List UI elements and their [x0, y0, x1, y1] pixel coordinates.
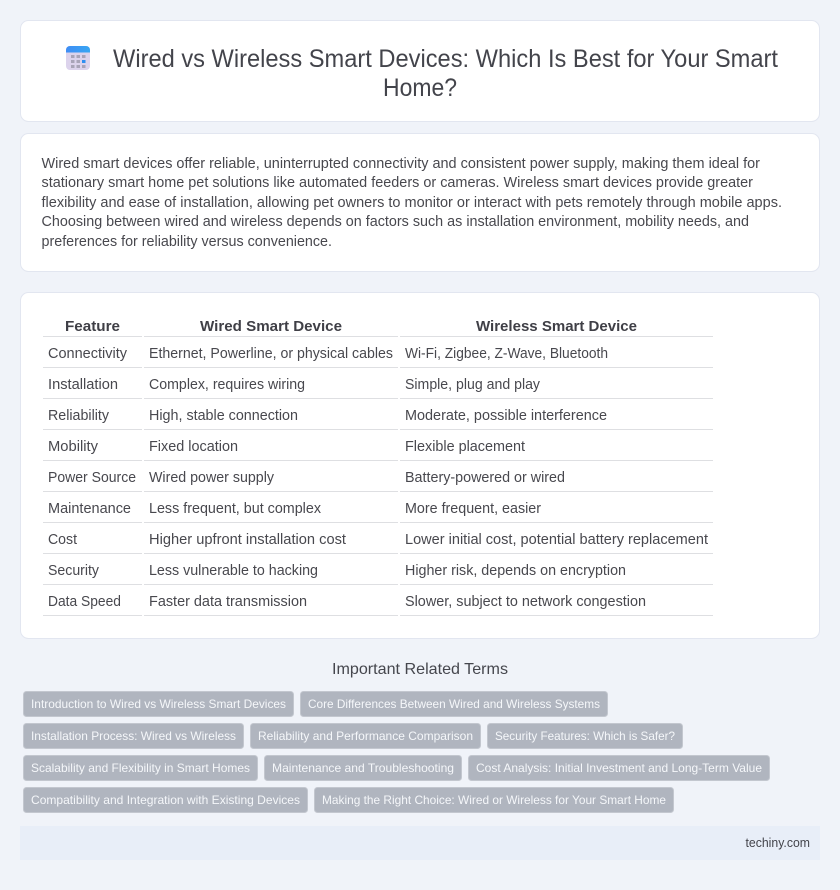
table row: power source [48, 470, 565, 486]
table row: mobility: Fixed location [149, 439, 238, 455]
table row: mobility: Mobility [48, 439, 99, 455]
icon: calendar [66, 46, 90, 70]
table row: installation: Installation [48, 377, 118, 393]
table row: connectivity: Connectivity [48, 346, 128, 362]
tag [24, 692, 294, 716]
table row: reliability [48, 408, 607, 424]
table row: maintenance: More frequent, easier [405, 501, 541, 517]
table row: cost: Higher upfront installation cost [149, 532, 346, 548]
footer [20, 826, 820, 860]
title: Home? [383, 74, 457, 102]
table row: maintenance: Maintenance [48, 501, 131, 517]
table row: power source: Battery-powered or wired [405, 470, 565, 486]
tag: Making the Right Choice: Wired or Wireless for Your Smart Home [322, 793, 666, 807]
tag: Maintenance and Troubleshooting [272, 761, 454, 775]
table row: reliability: Reliability [48, 408, 110, 424]
table row: power source: Power Source [48, 470, 136, 486]
table row: maintenance: Less frequent, but complex [149, 501, 322, 517]
text block: introduction paragraph: stationary smart home pet solutions like automated feeders or cameras. Wireless smart devices provide greater [42, 175, 753, 191]
tag [24, 788, 308, 812]
table row: security: Higher risk, depends on encryption [405, 563, 626, 579]
text block: introduction paragraph: Wired smart devices offer reliable, uninterrupted connectivity and consistent power supply, making them ideal for [42, 156, 760, 172]
text block: introduction paragraph: Choosing between wired and wireless depends on factors such as installation environment, mobility needs, and [42, 214, 749, 230]
text block: introduction paragraph [42, 156, 782, 250]
table row: reliability: Moderate, possible interference [405, 408, 607, 424]
tag [488, 724, 682, 748]
table row: power source: Wired power supply [149, 470, 275, 486]
table row: connectivity: Ethernet, Powerline, or physical cables [149, 346, 393, 362]
tag: Installation Process: Wired vs Wireless [31, 729, 236, 743]
tag: Core Differences Between Wired and Wireless Systems [308, 697, 600, 711]
table row: installation: Complex, requires wiring [149, 377, 305, 393]
tag [264, 756, 462, 780]
table row: connectivity: Wi-Fi, Zigbee, Z-Wave, Bluetooth [405, 346, 608, 362]
table row: cost: Lower initial cost, potential battery replacement [405, 532, 708, 548]
panel: introduction [20, 134, 820, 272]
table row: installation: Simple, plug and play [405, 377, 541, 393]
table row: cost: Cost [48, 532, 77, 548]
title [113, 45, 778, 102]
tag [24, 756, 258, 780]
tag: Introduction to Wired vs Wireless Smart Devices [31, 697, 286, 711]
table row: data speed: Data Speed [48, 594, 121, 610]
table row: security: Less vulnerable to hacking [149, 563, 318, 579]
table row: mobility [48, 439, 525, 455]
tag: Scalability and Flexibility in Smart Homes [31, 761, 250, 775]
tag list: related terms [24, 692, 770, 812]
table row: data speed [48, 594, 646, 610]
tag [314, 788, 674, 812]
tag [24, 724, 244, 748]
panel: header [20, 20, 820, 122]
panel: comparison table [20, 292, 820, 638]
table header row: Wireless Smart Device [476, 318, 637, 335]
text block: introduction paragraph: flexibility and ease of installation, allowing pet owners to monitor or interact with pets remotely through mobile apps. [42, 195, 782, 211]
tag: Compatibility and Integration with Existing Devices [31, 793, 300, 807]
table header row [65, 318, 637, 335]
tag [250, 724, 480, 748]
tag [300, 692, 608, 716]
table row: reliability: High, stable connection [149, 408, 298, 424]
table row: mobility: Flexible placement [405, 439, 525, 455]
table row: data speed: Faster data transmission [149, 594, 307, 610]
footer: techiny.com [746, 836, 810, 850]
table row: security [48, 563, 626, 579]
heading: important related terms: Important Related Terms [332, 661, 508, 678]
text block: introduction paragraph: preferences for reliability versus convenience. [42, 234, 332, 250]
tag: Reliability and Performance Comparison [258, 729, 473, 743]
tag [468, 756, 770, 780]
tag: Security Features: Which is Safer? [495, 729, 675, 743]
table row: security: Security [48, 563, 100, 579]
table row: data speed: Slower, subject to network congestion [405, 594, 646, 610]
table header row: Feature [65, 318, 120, 335]
table row: cost [48, 532, 708, 548]
table row: connectivity [48, 346, 608, 362]
table row: maintenance [48, 501, 541, 517]
table header row: Wired Smart Device [200, 318, 342, 335]
tag: Cost Analysis: Initial Investment and Long-Term Value [476, 761, 762, 775]
table row: installation [48, 377, 541, 393]
title: Wired vs Wireless Smart Devices: Which Is Best for Your Smart [113, 45, 778, 73]
